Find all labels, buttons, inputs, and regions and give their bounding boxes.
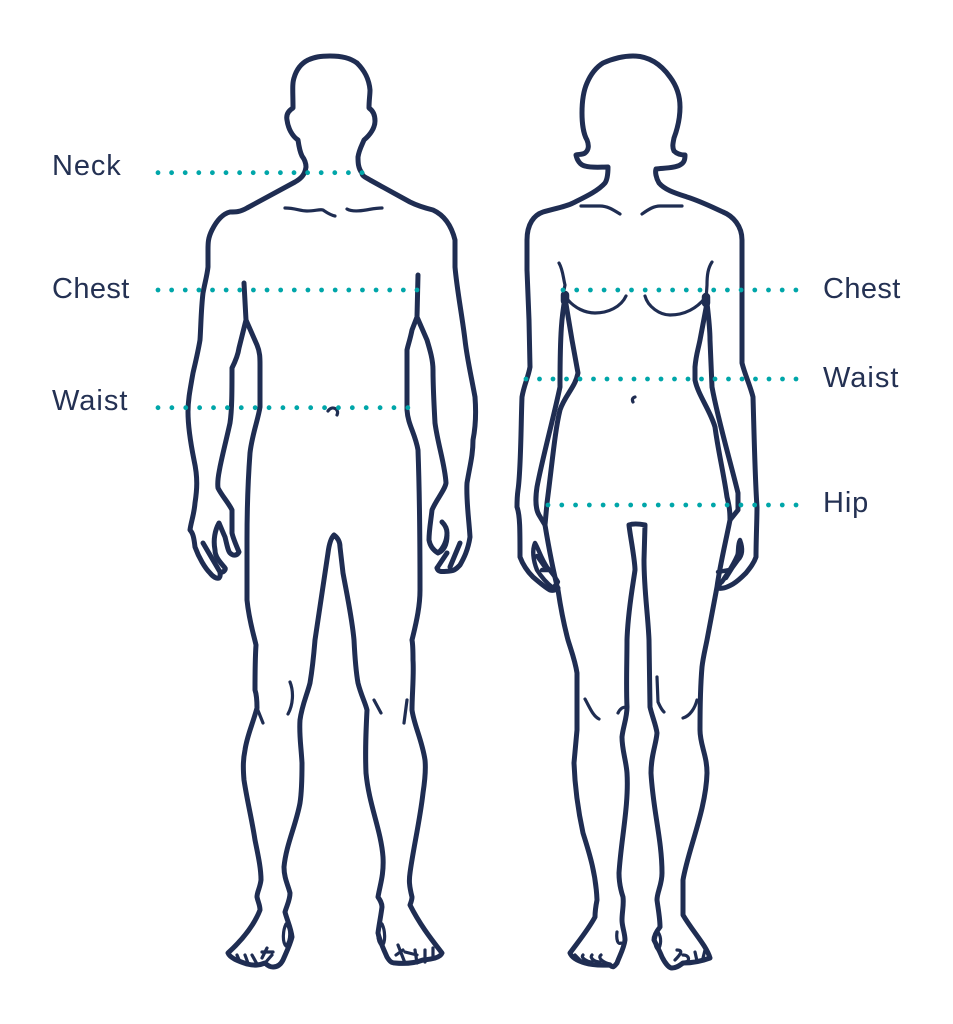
label: Waist left: Waist [52, 385, 128, 417]
female big toe oval [655, 932, 661, 950]
female collarbones [581, 206, 682, 214]
male knees [257, 682, 407, 723]
label: Chest left: Chest [52, 273, 130, 305]
measurement line: male chest [158, 288, 418, 292]
female head, shoulders and left arm outline [517, 56, 633, 590]
male head, neck, shoulders and left arm outline [188, 56, 357, 578]
measurement line: female waist [526, 377, 797, 381]
female knees [585, 677, 697, 719]
label: Hip: Hip [823, 487, 869, 519]
female chest lines [559, 262, 712, 315]
male left hand and inner arm [214, 283, 246, 572]
male right toes [396, 945, 433, 963]
female underarm joints [565, 295, 706, 303]
female toes [575, 932, 705, 964]
label: Neck: Neck [52, 150, 122, 182]
male body figure [188, 56, 476, 967]
male left toes [237, 948, 273, 964]
female navel [632, 397, 635, 402]
female left hand [533, 543, 558, 588]
male navel [328, 408, 338, 415]
measurement line: female chest [563, 288, 797, 292]
label: Chest right: Chest [823, 273, 901, 305]
female left inner arm [536, 298, 565, 525]
measurement line: male neck [158, 170, 362, 175]
label: Waist right: Waist [823, 362, 899, 394]
female right hand [717, 540, 742, 588]
male right arm and shoulder outline [417, 317, 447, 553]
male collarbones [285, 208, 382, 216]
female torso and legs [545, 298, 730, 968]
male big toe ovals [283, 924, 385, 946]
male right hand fingers [437, 543, 460, 568]
female right inner arm [707, 303, 738, 520]
female right arm, shoulder and head outline [633, 56, 757, 588]
measurement line: female hip [548, 503, 797, 507]
female body figure [517, 56, 757, 968]
male left torso and leg [228, 275, 442, 967]
measurement line: male waist [158, 405, 408, 410]
